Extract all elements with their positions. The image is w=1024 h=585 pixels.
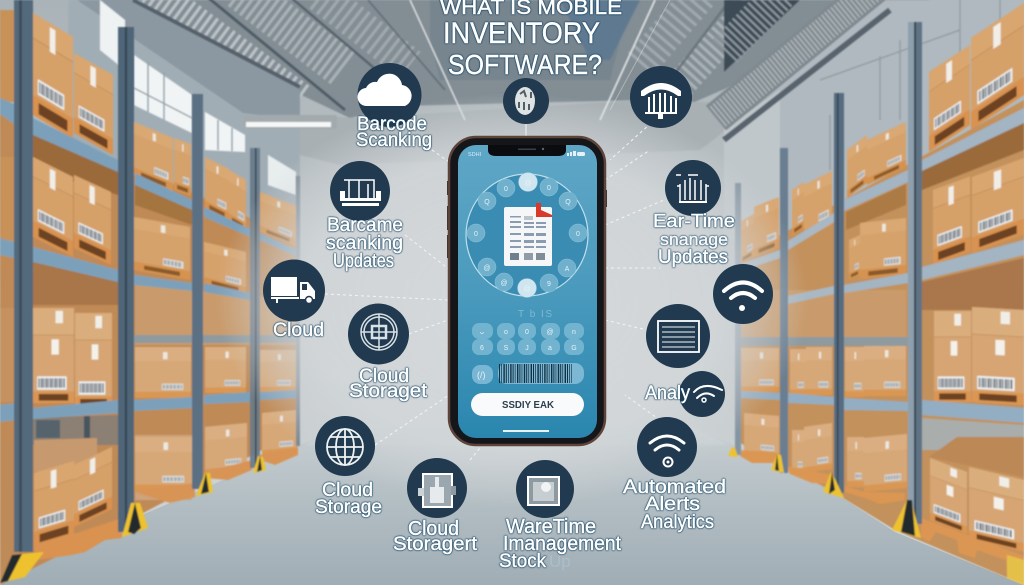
- row 4 boxes: [740, 413, 1024, 585]
- right wall: [716, 0, 1024, 240]
- home indicator: [503, 430, 549, 432]
- title: [440, 0, 622, 80]
- radial menu ring: @: [483, 265, 491, 272]
- row 2 boxes: [0, 157, 246, 294]
- label: Automated Alerts Analytics: [623, 477, 726, 533]
- radial menu ring: @: [500, 280, 508, 287]
- label: Cloud Storaget: [349, 366, 428, 402]
- label: Cloud Storage: [315, 480, 382, 518]
- label: Cloud Storagert: [393, 518, 478, 555]
- right shelf beams: [735, 108, 1024, 423]
- button grid: n: [572, 329, 576, 336]
- barcode scan row: [472, 363, 584, 384]
- phone side buttons: [447, 181, 607, 258]
- radial menu ring: 9: [547, 281, 551, 288]
- left shelving racks: [0, 0, 300, 585]
- button grid: ᴗ: [480, 329, 484, 336]
- label: Automated Alerts Analytics: Automated: [623, 477, 726, 498]
- label: Ear-Time snanage Updates: [653, 211, 735, 268]
- floor back edge highlight: [305, 425, 730, 445]
- icon: picture frame: [516, 460, 574, 518]
- icon: report panel: [646, 304, 710, 368]
- floor: [0, 425, 1024, 585]
- icon: wifi: [713, 264, 773, 324]
- row 4 boxes: [0, 410, 298, 565]
- icon: wifi alerts: [637, 417, 697, 477]
- label: WareTime Imanagement Stock Up: WareTime: [506, 516, 596, 538]
- label: Barcode Scanking: Barcode: [357, 114, 427, 135]
- label: Barcode Scanking: Scanking: [356, 130, 432, 151]
- icon: shelf unit: [330, 161, 390, 221]
- label: Barcame scanking Updates: scanking: [326, 233, 403, 254]
- phone screen: [458, 145, 597, 438]
- ceiling: [100, 0, 930, 165]
- icon: globe: [315, 416, 375, 476]
- label: Automated Alerts Analytics: Analytics: [641, 512, 714, 533]
- icon: delivery truck: [263, 260, 325, 322]
- label: Analy: Analy: [645, 383, 690, 404]
- label: Cloud: Cloud: [273, 320, 324, 341]
- left hazard wedges: [0, 456, 266, 583]
- label: Ear-Time snanage Updates: Ear-Time: [653, 211, 735, 231]
- button grid: 6: [480, 345, 484, 352]
- radial menu ring: [466, 172, 588, 298]
- label: WareTime Imanagement Stock Up: Imanagement: [503, 533, 621, 555]
- icon: scanner badge: [503, 78, 549, 124]
- radial menu ring: Q: [484, 199, 490, 206]
- button grid: J: [525, 345, 529, 352]
- button grid: @: [546, 329, 554, 336]
- row 2 boxes: [849, 158, 1024, 280]
- right hazard wedges: [728, 447, 921, 538]
- label: WareTime Imanagement Stock Up: Stock: [499, 551, 546, 572]
- label: Barcode Scanking: [356, 114, 432, 151]
- right shelving racks: [728, 3, 1024, 585]
- button grid: o: [504, 329, 508, 336]
- radial menu ring: A: [565, 266, 570, 273]
- network connector lines: [325, 0, 670, 460]
- scan button: [471, 393, 584, 416]
- left rack uprights: [14, 0, 300, 552]
- label: WareTime Imanagement Stock Up: Up: [549, 552, 571, 571]
- document icon: [504, 203, 552, 266]
- label: Barcame scanking Updates: [326, 215, 403, 272]
- title: SOFTWARE?: [448, 49, 602, 80]
- label: Barcame scanking Updates: Barcame: [327, 215, 403, 236]
- label: Cloud Storage: Storage: [315, 497, 382, 518]
- label: Cloud Storagert: Storagert: [393, 534, 478, 555]
- label: Ear-Time snanage Updates: Updates: [658, 247, 728, 268]
- radial menu ring: 0: [576, 231, 580, 238]
- button grid: a: [548, 345, 552, 352]
- phone: [447, 137, 607, 445]
- button grid: S: [504, 345, 509, 352]
- icon: cloud: [357, 63, 422, 127]
- radial menu ring: 0: [547, 185, 551, 192]
- notch: [488, 145, 566, 156]
- icon: warehouse building: [630, 66, 692, 128]
- scan button: SSDIY EAK: [502, 400, 555, 411]
- right rack uprights: [735, 22, 922, 524]
- radial menu ring: 0: [474, 231, 478, 238]
- status icons right: [567, 151, 585, 156]
- speaker: [518, 148, 544, 150]
- label: Cloud Storagert: Cloud: [408, 518, 459, 540]
- left shelf beams: [0, 98, 300, 422]
- label: Cloud Storaget: Storaget: [349, 381, 428, 402]
- label: Automated Alerts Analytics: Alerts: [645, 494, 700, 515]
- row 1 boxes: [0, 10, 296, 246]
- row 3 boxes: [0, 308, 296, 408]
- row 1 boxes: [740, 3, 1024, 264]
- status text left: SDHI: [468, 152, 482, 158]
- radial menu ring: @: [523, 286, 531, 293]
- phone body: [449, 137, 605, 445]
- icon: analytics signal: [679, 371, 725, 417]
- screen caption: T b IS: [518, 309, 552, 320]
- row 3 boxes: [741, 307, 1024, 405]
- label: Barcame scanking Updates: Updates: [333, 251, 394, 272]
- button grid: G: [571, 345, 577, 352]
- label: Ear-Time snanage Updates: snanage: [660, 230, 728, 249]
- label: Cloud Storage: Cloud: [322, 480, 373, 501]
- label: Cloud Storaget: Cloud: [359, 366, 409, 387]
- icon: inventory frame: [407, 458, 467, 518]
- label: WareTime Imanagement Stock Up: [499, 516, 621, 572]
- button grid: [472, 323, 584, 355]
- icon: network target: [348, 304, 409, 364]
- radial menu ring: Q: [565, 199, 571, 206]
- icon: warehouse shelves: [665, 160, 721, 216]
- button grid: 0: [525, 329, 529, 336]
- left wall and windows: [68, 0, 337, 300]
- radial menu ring: @: [524, 180, 532, 187]
- central mist: [200, 95, 824, 505]
- barcode scan row: (/): [477, 370, 486, 380]
- title: INVENTORY: [443, 17, 600, 50]
- radial menu ring: 0: [504, 186, 508, 193]
